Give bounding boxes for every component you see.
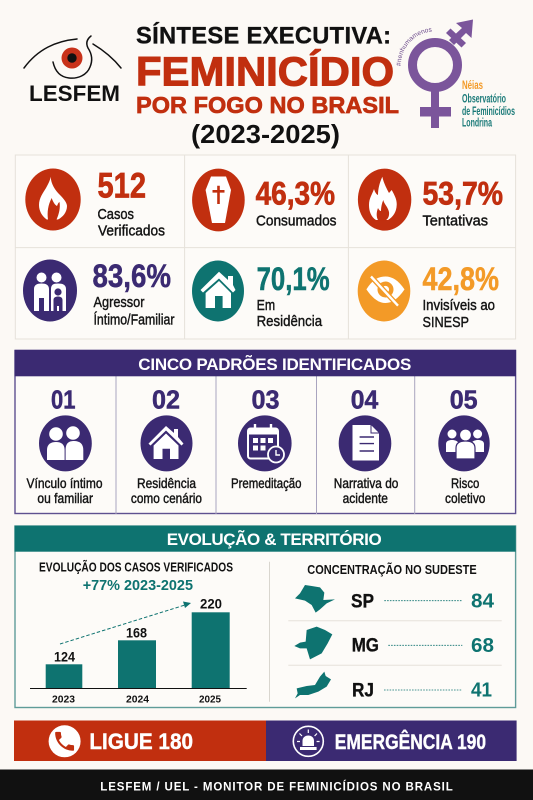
growth callout: +77% 2023-2025 — [83, 577, 193, 594]
icon: alarm beacon — [293, 726, 323, 756]
number: 02 — [152, 387, 180, 415]
concentration list — [288, 562, 502, 702]
row: RJ — [295, 672, 492, 702]
icon: two people — [39, 415, 92, 471]
stat: 70,1% em residência — [192, 260, 330, 330]
icon: document — [339, 415, 391, 471]
label: Verificados — [98, 223, 165, 240]
hashtag on arc: #nenhumamenos — [396, 28, 432, 66]
number: 03 — [252, 387, 280, 415]
value: 68 — [471, 635, 494, 657]
state: SP — [351, 590, 374, 612]
icon: house — [140, 415, 192, 471]
value: 53,7% — [422, 175, 503, 211]
organisation name: Néias — [462, 78, 483, 92]
label — [131, 476, 202, 506]
label — [334, 476, 399, 506]
label: Agressor — [94, 294, 144, 311]
icon: eye — [24, 36, 121, 78]
bar values — [54, 595, 222, 665]
bar values: 168 — [126, 624, 147, 640]
arrow: upward trend — [60, 602, 191, 644]
label — [26, 476, 103, 506]
label: ou familiar — [37, 491, 93, 506]
pattern 04 — [334, 387, 399, 506]
year labels: 2024 — [126, 693, 149, 705]
icon: flame — [358, 169, 411, 231]
footer — [0, 770, 533, 800]
stat: 46,3% consumados — [192, 169, 336, 231]
label: Vínculo íntimo — [26, 476, 103, 491]
map: Minas Gerais — [294, 627, 332, 659]
label: Premeditação — [231, 476, 302, 491]
chart title: EVOLUÇÃO DOS CASOS VERIFICADOS — [39, 560, 233, 575]
list title: CONCENTRAÇÃO NO SUDESTE — [307, 562, 477, 577]
label: Em — [257, 297, 275, 314]
row: SP — [295, 585, 495, 613]
section header: EVOLUÇÃO & TERRITÓRIO — [167, 529, 382, 549]
label — [98, 206, 165, 240]
label: Íntimo/Familiar — [94, 311, 174, 328]
organisation description — [462, 94, 515, 130]
panel: emergência 190 — [266, 720, 517, 761]
icon: flame — [25, 168, 81, 230]
stat: 53,7% tentativas — [358, 169, 503, 231]
stat: 83,6% agressor — [23, 258, 174, 328]
title line 1: SÍNTESE EXECUTIVA: — [136, 22, 391, 50]
label: Tentativas — [422, 212, 488, 230]
row: MG — [294, 627, 494, 659]
number: 04 — [351, 387, 379, 415]
pattern 01 — [26, 387, 103, 506]
logo: Néias Observatório de Feminicídios Londrina — [396, 20, 515, 130]
bar values: 220 — [200, 595, 222, 611]
icon: gender symbol — [412, 20, 473, 128]
bar chart: evolução dos casos — [30, 560, 247, 705]
title years: (2023-2025) — [191, 119, 340, 149]
label: coletivo — [445, 491, 486, 506]
year labels: 2025 — [199, 693, 221, 705]
label: Narrativa do — [334, 476, 399, 491]
organisation description: Londrina — [462, 118, 492, 130]
section header — [14, 526, 516, 552]
footer: LESFEM / UEL - MONITOR DE FEMINICÍDIOS NO BRASIL — [100, 781, 453, 794]
pattern 05 — [438, 387, 490, 506]
label: Residência — [257, 313, 323, 330]
title line 3: POR FOGO NO BRASIL — [136, 92, 399, 118]
bars — [46, 612, 230, 688]
icon: calendar with clock — [238, 415, 292, 471]
value: 83,6% — [92, 258, 171, 294]
label: Casos — [98, 206, 134, 223]
value: 42,8% — [422, 261, 499, 297]
section header — [15, 350, 516, 376]
emergency text: EMERGÊNCIA 190 — [335, 730, 486, 754]
label: acidente — [343, 491, 388, 506]
logo wordmark: LESFEM — [29, 81, 120, 106]
pattern 02 — [131, 387, 202, 506]
value: 512 — [98, 167, 146, 206]
icon: crossed eye — [358, 260, 410, 322]
label — [422, 297, 495, 331]
bar values: 124 — [54, 649, 75, 665]
year labels: 2023 — [52, 693, 75, 705]
value: 46,3% — [256, 175, 335, 211]
pattern 03 — [231, 387, 302, 491]
panel: ligue 180 — [14, 720, 266, 761]
icon: house — [192, 260, 244, 322]
value: 41 — [471, 680, 492, 702]
label — [257, 297, 323, 330]
stat: 512 casos verificados — [25, 167, 165, 240]
label: SINESP — [422, 314, 469, 331]
panel: cinco padrões identificados — [15, 350, 516, 514]
state: MG — [352, 635, 379, 657]
label: Residência — [137, 476, 196, 491]
panel: key figures — [15, 155, 516, 339]
value: 84 — [471, 590, 495, 612]
icon: phone — [49, 725, 81, 757]
icon: family — [23, 260, 77, 322]
title line 2: FEMINICÍDIO — [136, 49, 394, 95]
icon: group of people — [438, 415, 490, 471]
panel: evolução e território — [14, 526, 516, 708]
map: Rio de Janeiro — [295, 672, 331, 698]
title — [136, 22, 399, 149]
value: 70,1% — [257, 261, 330, 297]
organisation description: Observatório — [462, 94, 506, 106]
state: RJ — [352, 680, 374, 702]
number: 05 — [450, 387, 478, 415]
year labels — [52, 693, 221, 705]
label: Consumados — [256, 212, 336, 230]
label — [94, 294, 174, 328]
label — [445, 476, 486, 506]
logo: LESFEM — [24, 36, 121, 106]
hotline text: LIGUE 180 — [89, 729, 193, 754]
number: 01 — [51, 387, 76, 415]
label: Invisíveis ao — [422, 297, 495, 314]
label: Risco — [451, 476, 480, 491]
icon: coffin — [192, 169, 245, 231]
section header: CINCO PADRÕES IDENTIFICADOS — [138, 354, 411, 374]
stat: 42,8% invisíveis — [358, 260, 499, 331]
label: como cenário — [131, 491, 202, 506]
map: São Paulo — [295, 585, 335, 613]
